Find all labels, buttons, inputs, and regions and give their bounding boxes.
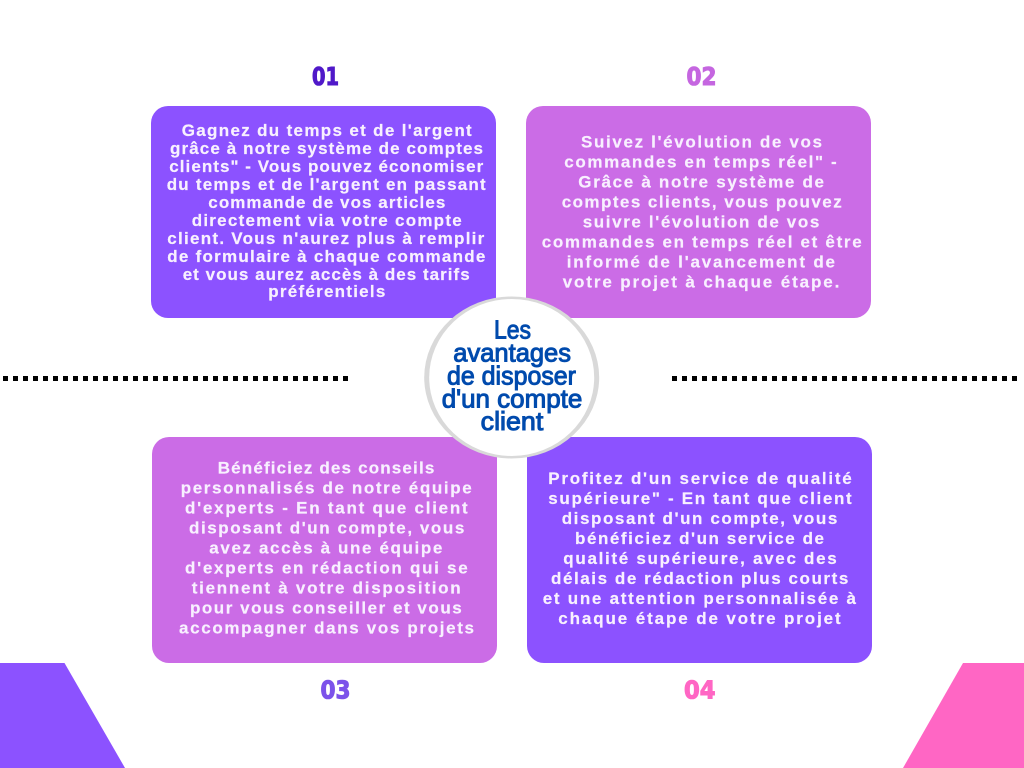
title: d'un compte: [442, 383, 582, 413]
text: card 01 body: [167, 121, 486, 301]
number 02: 02: [686, 62, 716, 91]
number 03: 03: [320, 676, 350, 704]
panel: card 03: [152, 437, 497, 663]
text: card 03 body: tiennent à votre disposition: [192, 578, 461, 598]
text: card 04 body: bénéficiez d'un service de: [575, 529, 824, 548]
text: card 01 body: directement via votre compte: [192, 211, 462, 230]
title: [442, 314, 582, 436]
decorative shape: violet bottom-left trapezoid: [0, 663, 125, 768]
text: card 01 body: préférentiels: [268, 282, 385, 301]
text: card 01 body: client. Vous n'aurez plus à remplir: [167, 229, 485, 248]
text: card 02 body: suivre l'évolution de vos: [583, 212, 819, 231]
text: card 02 body: Grâce à notre système de: [578, 172, 824, 191]
text: card 04 body: délais de rédaction plus courts: [551, 569, 848, 588]
text: card 04 body: qualité supérieure, avec des: [563, 549, 837, 568]
panel: card 04: [527, 437, 872, 663]
dotted line: left: [3, 376, 350, 381]
central circle with title: [424, 296, 599, 458]
text: card 03 body: d'experts en rédaction qui se: [185, 558, 468, 578]
text: card 03 body: personnalisés de notre équipe: [181, 478, 472, 497]
decorative shape: pink bottom-right trapezoid: [903, 663, 1024, 768]
text: card 01 body: et vous aurez accès à des tarifs: [183, 265, 470, 284]
title: client: [481, 406, 544, 436]
text: card 04 body: [543, 469, 857, 628]
text: card 04 body: Profitez d'un service de qualité: [548, 469, 852, 488]
text: card 04 body: disposant d'un compte, vous: [562, 509, 837, 528]
text: card 02 body: commandes en temps réel et être: [542, 232, 862, 251]
text: card 02 body: comptes clients, vous pouvez: [562, 192, 842, 211]
text: card 04 body: chaque étape de votre projet: [558, 609, 841, 628]
text: card 03 body: avez accès à une équipe: [209, 538, 442, 558]
text: card 03 body: pour vous conseiller et vous: [190, 598, 462, 618]
title: Les: [494, 314, 531, 344]
text: card 01 body: de formulaire à chaque commande: [167, 247, 485, 266]
text: card 02 body: [542, 132, 862, 291]
text: card 02 body: commandes en temps réel" -: [564, 152, 837, 171]
dotted line: right: [672, 376, 1019, 381]
panel: card 02: [526, 106, 871, 318]
text: card 01 body: du temps et de l'argent en passant: [167, 175, 486, 194]
number 04: 04: [684, 676, 716, 704]
text: card 01 body: grâce à notre système de comptes: [170, 139, 483, 158]
panel: card 01: [151, 106, 496, 318]
title: avantages: [453, 338, 571, 368]
text: card 03 body: accompagner dans vos projets: [179, 618, 474, 638]
text: card 02 body: Suivez l'évolution de vos: [581, 132, 822, 151]
text: card 02 body: informé de l'avancement de: [567, 252, 835, 271]
text: card 03 body: [179, 458, 474, 638]
text: card 04 body: supérieure" - En tant que client: [548, 489, 852, 508]
text: card 02 body: votre projet à chaque étape.: [563, 272, 839, 291]
text: card 03 body: d'experts - En tant que client: [185, 498, 468, 517]
text: card 01 body: Gagnez du temps et de l'argent: [182, 121, 472, 140]
text: card 03 body: disposant d'un compte, vous: [189, 518, 464, 537]
text: card 01 body: clients" - Vous pouvez économiser: [169, 157, 484, 176]
title: de disposer: [447, 360, 576, 390]
text: card 01 body: commande de vos articles: [208, 193, 445, 212]
text: card 04 body: et une attention personnalisée à: [543, 589, 857, 608]
text: card 03 body: Bénéficiez des conseils: [218, 458, 434, 477]
number 01: 01: [312, 62, 339, 91]
